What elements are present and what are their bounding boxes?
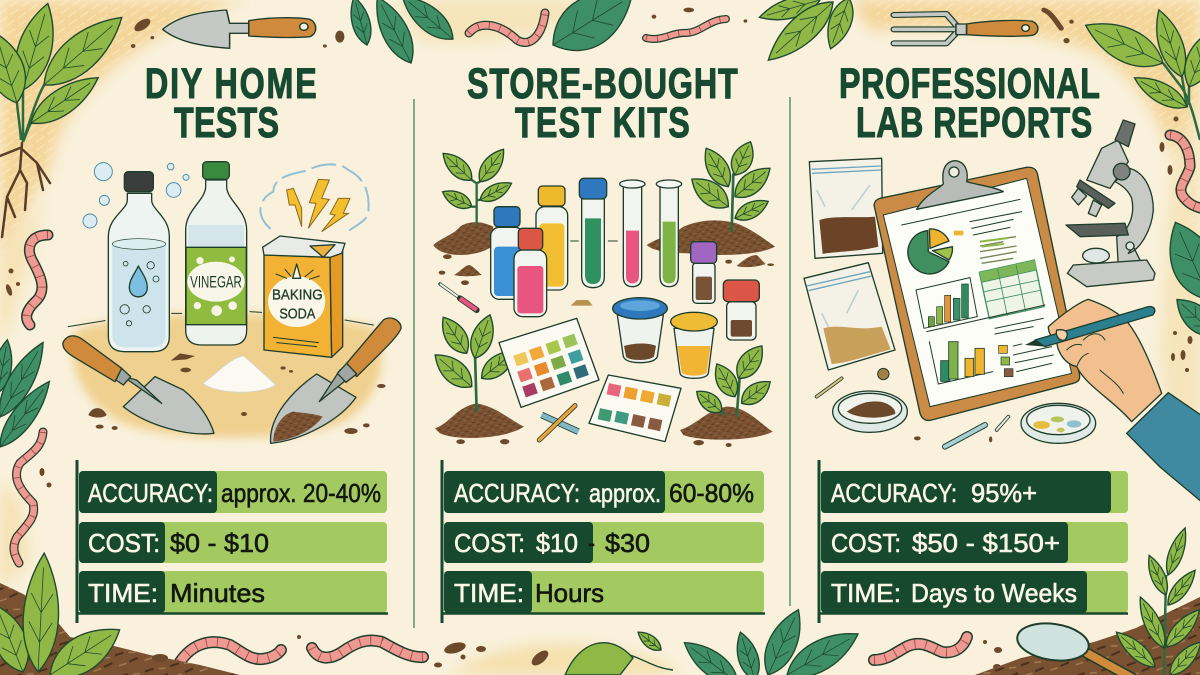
heading: Store-Bought Test Kits: TEST KITS	[515, 100, 690, 147]
accuracy bar	[821, 471, 1128, 513]
illustration: professional lab report	[804, 120, 1200, 503]
right trowel with soil	[271, 318, 401, 443]
border: bottom-right soil, plant and magnifier	[975, 526, 1200, 675]
results table	[979, 260, 1044, 319]
writing hand	[1025, 299, 1162, 422]
cost bar: COST:	[88, 528, 160, 558]
border: top-right plant	[1078, 6, 1200, 372]
accuracy bar: ACCURACY:	[831, 478, 957, 508]
accuracy bar: 95%+	[971, 478, 1037, 508]
pie chart	[908, 229, 952, 274]
bubbles	[83, 163, 189, 228]
cost bar: $0 - $10	[170, 528, 269, 558]
border: top fork	[652, 8, 1074, 43]
microscope	[1066, 120, 1155, 287]
purple-capped soil vial	[691, 242, 717, 303]
baking soda box: SODA	[279, 306, 316, 322]
cost bar: -	[588, 528, 595, 558]
border: bottom-centre leaves	[565, 604, 1002, 675]
test strips	[539, 406, 578, 440]
test tube, green with blue cap	[579, 178, 607, 288]
accuracy bar	[79, 471, 387, 513]
test tube, pink	[620, 180, 645, 287]
sand ground	[73, 313, 382, 438]
cost bar: $10	[536, 528, 578, 558]
panel 1 stat bars	[77, 460, 388, 623]
colour chart, eight swatches	[589, 375, 681, 442]
border: bottom-left soil and plant	[0, 552, 551, 675]
yellow-lidded liquid cup	[671, 312, 717, 378]
illustration: store-bought test kits	[428, 138, 776, 447]
crumbs	[439, 254, 774, 447]
culture petri dish	[1021, 403, 1096, 443]
column dividers	[414, 97, 790, 628]
illustration: DIY vinegar and baking soda test	[63, 162, 401, 443]
soil mounds	[433, 220, 775, 440]
border: top centre leaves	[346, 0, 859, 70]
border: top trowel	[131, 10, 344, 48]
vinegar bottle	[186, 162, 247, 345]
accuracy bar: ACCURACY:	[88, 478, 213, 508]
left trowel	[63, 336, 214, 434]
report contents	[902, 199, 1053, 384]
time bar: Hours	[535, 578, 604, 608]
time bar: TIME:	[88, 578, 158, 608]
time bar	[79, 571, 387, 613]
cost bar: COST:	[831, 528, 901, 558]
border: left leaves	[0, 268, 58, 488]
baking soda powder pile	[203, 356, 276, 392]
heading: Store-Bought Test Kits: STORE-BOUGHT	[467, 61, 738, 108]
heading: Professional Lab Reports	[839, 61, 1100, 147]
test tube, green	[656, 180, 682, 287]
heading: DIY Home Tests: TESTS	[174, 100, 279, 147]
blue-lidded soil cup	[613, 298, 667, 363]
plants	[428, 138, 776, 418]
soil crumbs	[88, 353, 386, 434]
accuracy bar: ACCURACY:	[454, 478, 580, 508]
dark soil sample bag	[809, 158, 883, 258]
cost bar	[444, 522, 764, 563]
blue shirt cuff	[1127, 393, 1200, 503]
colour chart, twelve swatches	[499, 318, 599, 407]
heading: Professional Lab Reports: LAB REPORTS	[856, 100, 1092, 147]
accuracy bar	[444, 471, 764, 513]
soil petri dish	[833, 391, 907, 432]
time bar: TIME:	[831, 578, 901, 608]
cost bar: $50 - $150+	[912, 528, 1060, 558]
time bar: Days to Weeks	[911, 578, 1077, 608]
clipboard	[874, 161, 1080, 420]
cost bar: COST:	[454, 528, 525, 558]
accuracy bar: 60-80%	[669, 478, 754, 508]
heading: Professional Lab Reports: PROFESSIONAL	[839, 61, 1100, 108]
panel 3 stat bars	[819, 460, 1128, 623]
dropper	[440, 284, 477, 310]
baking soda box: BAKING	[272, 287, 323, 303]
yellow bottle	[536, 186, 568, 290]
vinegar bottle: VINEGAR	[190, 273, 242, 292]
panel 2 stat bars	[442, 460, 765, 623]
fizz cloud and lightning	[260, 164, 369, 232]
time bar: Minutes	[170, 578, 265, 608]
time bar	[821, 571, 1128, 613]
cost bar	[821, 522, 1128, 563]
pink bottle	[514, 228, 547, 317]
cost bar	[79, 522, 387, 563]
accuracy bar: approx. 20-40%	[221, 478, 381, 508]
accuracy bar: approx.	[589, 478, 661, 508]
time bar: TIME:	[454, 578, 524, 608]
blue bottle	[491, 207, 523, 299]
sandy soil sample bag	[804, 263, 895, 370]
heading: DIY Home Tests	[145, 61, 317, 147]
bar chart two	[929, 342, 993, 384]
dashes between tubes	[571, 239, 617, 242]
heading: DIY Home Tests: DIY HOME	[145, 61, 317, 108]
water bottle	[108, 172, 169, 352]
heading: Store-Bought Test Kits	[467, 61, 738, 147]
baking soda box	[263, 236, 345, 357]
bar chart one	[916, 278, 977, 328]
border: top-left plant with roots	[0, 0, 133, 237]
cost bar: $30	[605, 528, 650, 558]
red-capped soil vial	[723, 280, 759, 340]
time bar	[444, 571, 764, 613]
small lab tools and crumbs	[817, 368, 1008, 447]
